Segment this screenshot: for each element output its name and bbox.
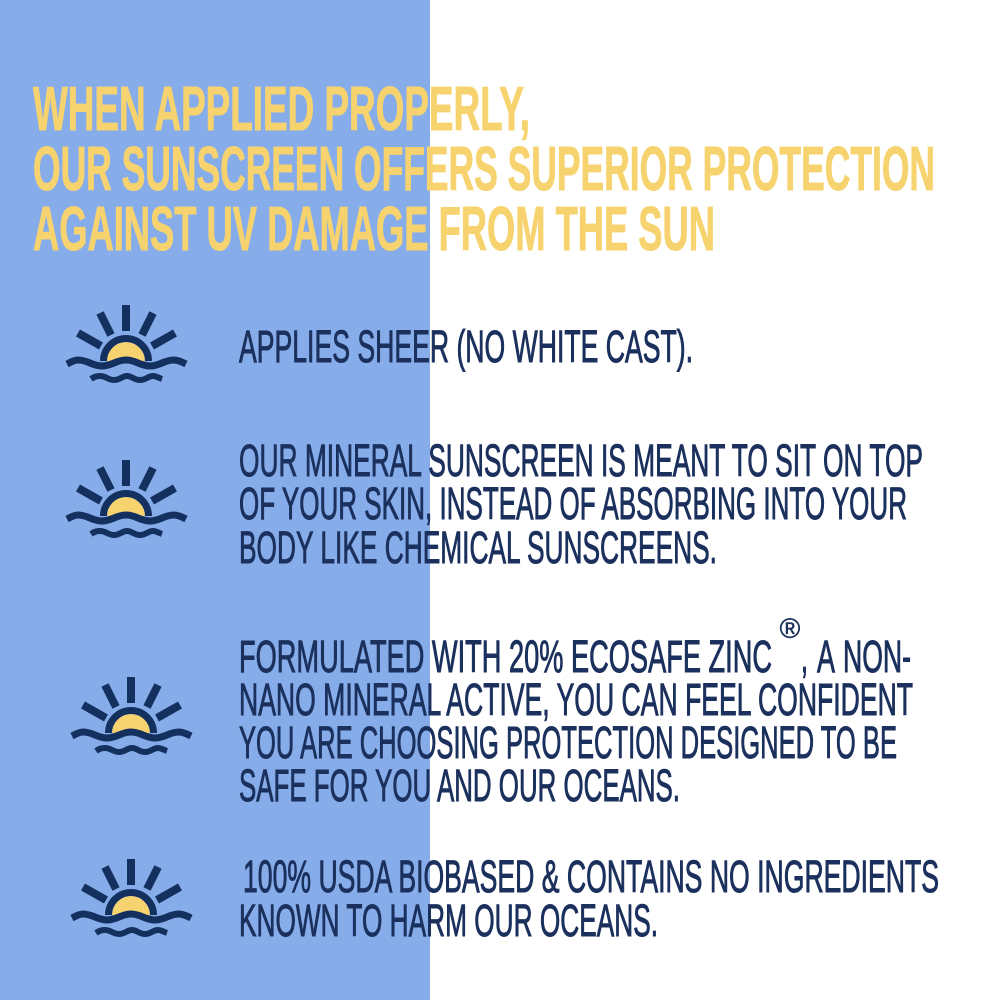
icon: sun over waves 2: [67, 460, 186, 535]
icon: sun over waves 3: [72, 677, 191, 752]
text block: EcoSafe zinc: [239, 613, 913, 811]
text block: EcoSafe zinc: A: [817, 631, 835, 682]
icon: sun over waves 4: [72, 859, 191, 934]
text block: applies sheer: APPLIES SHEER (NO WHITE CAST).: [239, 321, 693, 372]
text block: USDA biobased: KNOWN TO HARM OUR OCEANS.: [239, 895, 658, 946]
title: [33, 74, 935, 264]
text block: mineral sunscreen: [239, 435, 923, 573]
text block: EcoSafe zinc: ®: [780, 613, 801, 644]
text block: EcoSafe zinc: NON-: [843, 631, 911, 682]
text block: EcoSafe zinc: ,: [801, 631, 808, 682]
icon: sun over waves 1: [67, 305, 186, 380]
text block: USDA biobased: [239, 851, 939, 946]
background panel: blue left half: [0, 0, 430, 1000]
title: WHEN APPLIED PROPERLY,: [33, 74, 530, 144]
text block: EcoSafe zinc: SAFE FOR YOU AND OUR OCEANS.: [239, 760, 680, 811]
